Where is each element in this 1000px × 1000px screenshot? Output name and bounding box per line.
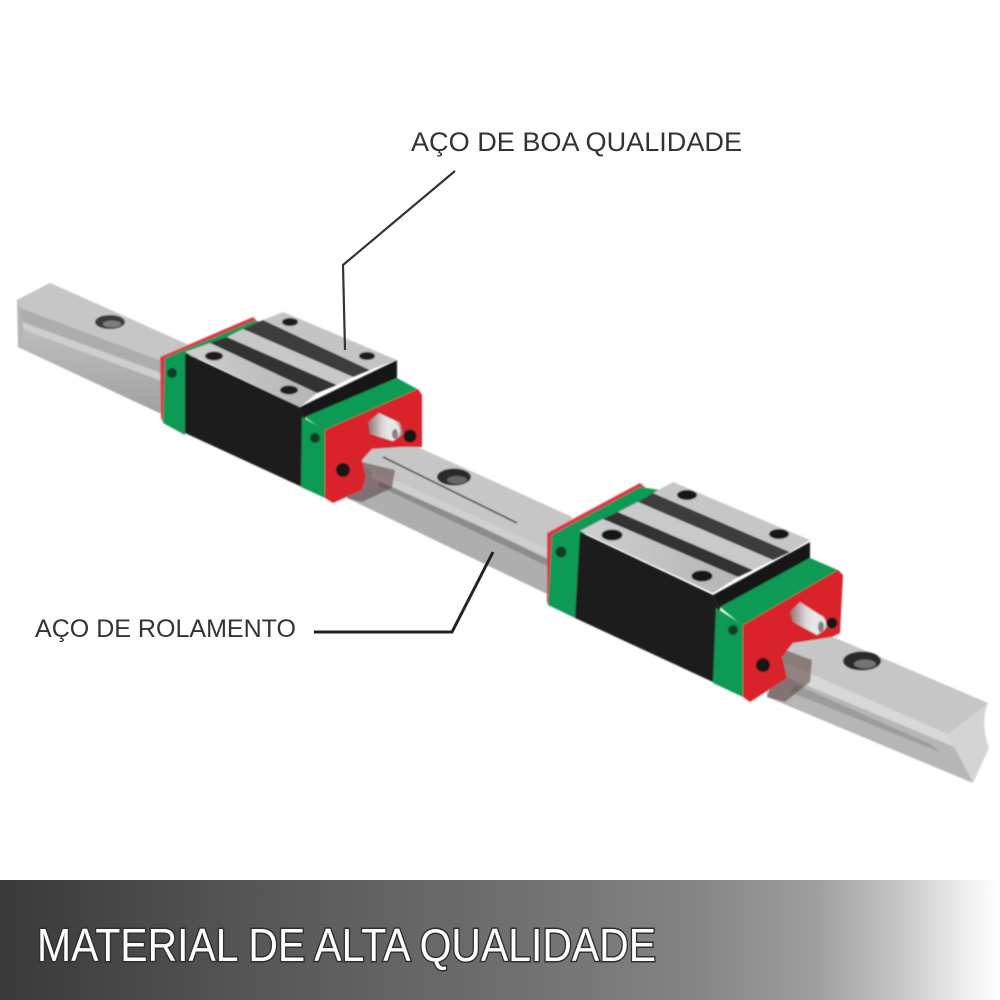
leader line: rolled steel (314, 552, 493, 632)
rail: middle segment (345, 430, 572, 600)
bottom banner (0, 880, 1000, 1000)
grease nipple (368, 413, 403, 441)
rail: left segment (17, 283, 200, 418)
shadow under carriage 1 (347, 462, 395, 502)
carriage 1 (160, 312, 422, 503)
rail: right segment (765, 610, 989, 783)
carriage 2 (547, 482, 843, 702)
linear guide rail and carriages (17, 283, 989, 783)
shadow under carriage 2 (767, 650, 812, 702)
grease nipple (790, 602, 828, 635)
rail end face (947, 703, 989, 783)
banner heading: MATERIAL DE ALTA QUALIDADE (37, 919, 656, 971)
label: good quality steel: AÇO DE BOA QUALIDADE (411, 127, 742, 157)
leader line: good quality steel (343, 171, 455, 350)
label: rolled steel: AÇO DE ROLAMENTO (35, 615, 296, 643)
